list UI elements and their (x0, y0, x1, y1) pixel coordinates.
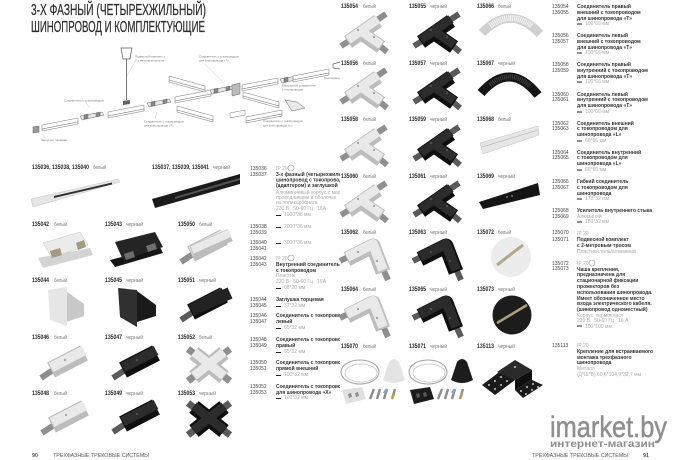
spec: 135046 135047 left feed (250, 313, 340, 329)
spec: 135040 135041 length (250, 240, 311, 250)
spec: 135113: шинопровода (577, 360, 612, 366)
spec: 135044 135045 end cap: 37*32 мм (284, 303, 306, 309)
product: 135044 white end cap: 135044 (32, 277, 49, 284)
product: 135068 white joint reinforcement (477, 116, 539, 154)
product: 135113 black recessed mounting bracket: черный (498, 343, 515, 350)
product: 135050 white straight connector: белый (199, 221, 212, 228)
icon: pendant cup and wire (121, 48, 132, 105)
spec: 135050 135051 straight connector (250, 360, 340, 376)
spec: 135050 135051 straight connector: Соединитель с токопроводом (276, 360, 351, 366)
product: 135043 black inner connector: 135043 (105, 221, 122, 228)
product: 135073 black mounting cup: черный (498, 286, 515, 293)
spec: 135058 135059: 135059 (552, 68, 569, 74)
product: 135060 white T connector: 135060 (341, 173, 358, 180)
spec: 135040 135041 length: 135040 (250, 240, 267, 246)
product: 135067 black flexible connector (477, 60, 538, 95)
spec: 135066 135067: с токопроводом для (577, 185, 628, 191)
spec: 135056 135057: Соединитель левый (577, 32, 628, 39)
title: 3-Х ФАЗНЫЙ (ЧЕТЫРЕХЖИЛЬНЫЙ) (31, 1, 206, 19)
spec: 135054 135055: 100*66 мм (585, 21, 610, 27)
spec: 135054 135055: для шинопровода «Т» (577, 16, 632, 22)
spec: 135040 135041 length: 135041 (250, 246, 267, 252)
spec: 135036 135037 track: (адаптером) и заглушкой (276, 182, 338, 189)
product: 135064 white L connector: 135064 (341, 286, 358, 293)
spec: 135058 135059: внутренний с токопроводом (577, 67, 648, 74)
footer: right page: 91 (643, 453, 649, 459)
product: 135061 black T connector: черный (430, 173, 447, 180)
spec: 135058 135059: Соединитель правый (577, 61, 631, 68)
spec: 135042 135043 inner connector (250, 255, 340, 291)
product: white three-phase track (31, 164, 120, 207)
product: 135055 black T connector (409, 3, 460, 52)
spec: 135070 135071: 135071 (552, 237, 569, 243)
spec: 135042 135043 inner connector: 135043 (250, 262, 267, 268)
spec: 135070 135071: Пластик/сталь/алюминий (577, 248, 636, 255)
spec: 135048 135049 right feed: правый (276, 342, 295, 349)
spec: 135066 135067: Гибкий соединитель (577, 178, 628, 185)
spec: 135060 135061: 135060 (552, 92, 569, 98)
product: 135054 white T connector (341, 3, 387, 52)
product: 135067 black flexible connector: черный (498, 60, 515, 67)
product: black three-phase track: 135037, 135039, 135041 (152, 164, 209, 171)
spec: 135036 135037 track (250, 164, 340, 216)
spec: 135058 135059: 135058 (552, 62, 569, 68)
product: 135060 white T connector (341, 173, 387, 221)
product: 135055 black T connector: 135055 (409, 3, 426, 10)
product: 135048 white right feed connector (32, 390, 85, 433)
spec: 135060 135061: для шинопровода «Т» (577, 103, 632, 109)
spec: 135036 135037 track: шинопровод с токопроводом (276, 178, 349, 184)
title (31, 1, 206, 36)
product: 135044 white end cap (32, 277, 84, 326)
spec: 135042 135043 inner connector: Пластик (276, 273, 296, 279)
product: 135055 black T connector: черный (430, 3, 447, 10)
spec: 135072 135073: 100*100 мм (585, 324, 612, 330)
product: 135072 white mounting cup: белый (498, 229, 511, 236)
product: 135049 black right feed connector (105, 390, 156, 432)
spec: 135062 135063: 66*66 мм (585, 138, 607, 144)
spec: 135052 135053 X connector: 135052 (250, 384, 267, 390)
product: 135067 black flexible connector: 135067 (477, 60, 494, 67)
product: 135053 black X connector: черный (199, 390, 216, 397)
product: 135066 white flexible connector: 135066 (477, 3, 494, 10)
product: 135053 black X connector: 135053 (178, 390, 195, 397)
spec: 135042 135043 inner connector: 68*20 мм (284, 285, 306, 291)
spec: 135070 135071: с 2-метровым тросом (577, 243, 631, 249)
spec: 135038 135039 length: 135038 (250, 224, 267, 230)
spec: 135113: монтажа трехфазного (577, 354, 632, 361)
spec: 135072 135073: 135072 (552, 261, 569, 267)
spec: 135042 135043 inner connector: 135042 (250, 256, 267, 262)
product: 135073 black mounting cup: 135073 (477, 286, 494, 293)
spec: 135068 135069: 135069 (552, 214, 569, 220)
watermark: imarket.by: интернет-магазин (550, 439, 655, 450)
spec: 135046 135047 left feed: 65*32 мм (284, 325, 306, 331)
spec: 135064 135065: 66*66 мм (585, 167, 607, 173)
product: 135073 black mounting cup (477, 286, 532, 334)
spec: 135068 135069: Алюминий (577, 213, 602, 220)
product: 135053 black X connector (178, 390, 230, 435)
product: 135057 black T connector: 135057 (409, 60, 426, 67)
spec: 135052 135053 X connector: для шинопровода «Х» (276, 390, 332, 396)
product: 135047 black left feed connector: черный (126, 334, 143, 341)
spec: 135113: Металл (577, 366, 595, 372)
product: 135069 black joint reinforcement: черный (498, 173, 515, 180)
product: 135061 black T connector (409, 173, 460, 221)
spec: 135072 135073: Корпус: термопласт (577, 313, 624, 319)
spec: 135066 135067: 135067 (552, 185, 569, 191)
product: 135058 white T connector: 135058 (341, 116, 358, 123)
product: 135062 white L connector: 135062 (341, 229, 358, 236)
exploded track system diagram: для шинопровода «Т» (199, 58, 229, 62)
spec: 135072 135073: 220 В 50-60 Гц 16 А (577, 318, 629, 324)
spec: 135056 135057: для шинопровода «Т» (577, 45, 632, 51)
spec: 135070 135071: Подвесной комплект (577, 236, 629, 243)
product: 135063 black L connector (409, 229, 461, 280)
spec: 135044 135045 end cap: 135045 (250, 303, 267, 309)
spec: 135060 135061: 100*66 мм (585, 109, 610, 115)
product: 135048 white right feed connector: 135048 (32, 390, 49, 397)
spec: 135062 135063: шинопровода «L» (577, 132, 622, 138)
product: 135071 black suspension kit: 135071 (409, 343, 426, 350)
spec: 135072 135073: предназначена для (577, 272, 625, 278)
product: 135063 black L connector: черный (430, 229, 447, 236)
product: 135054 white T connector: 135054 (341, 3, 358, 10)
spec: 135054 135055: 135055 (552, 10, 569, 16)
product: 135052 white X connector: белый (199, 334, 212, 341)
product: 135052 white X connector (178, 334, 230, 381)
spec: 135062 135063: Соединитель внешний (577, 120, 634, 127)
product: 135059 black T connector (409, 116, 460, 165)
product: 135043 black inner connector (105, 221, 163, 267)
spec: 135046 135047 left feed: 135047 (250, 319, 267, 325)
footer: right page: ТРЕХФАЗНЫЕ ТРЕКОВЫЕ СИСТЕМЫ (532, 453, 628, 459)
exploded track system diagram: Подвесной комплект с (135, 54, 166, 58)
exploded track system diagram: Соединитель с токопроводом (263, 119, 303, 123)
product: 135048 white right feed connector: белый (54, 390, 67, 397)
exploded track system diagram: Соединитель с токопроводом (64, 98, 104, 102)
specification list: right page (552, 3, 653, 378)
product: 135050 white straight connector: 135050 (178, 221, 195, 228)
spec: 135054 135055: внешний с токопроводом (577, 9, 641, 16)
spec: 135056 135057: 135056 (552, 33, 569, 39)
spec: 135050 135051 straight connector: прямой внешний (276, 365, 318, 372)
spec: 135062 135063 (552, 120, 634, 144)
product: 135068 white joint reinforcement: белый (498, 116, 511, 123)
spec: 135072 135073: Имеет обозначенное место (577, 295, 644, 302)
product: 135046 white left feed connector (32, 334, 84, 378)
exploded track system diagram: Соединитель с токопроводом (144, 120, 184, 124)
spec: 135050 135051 straight connector: 100*32 мм (284, 372, 309, 378)
spec: 135113 (552, 343, 653, 378)
spec: 135066 135067: 135066 (552, 179, 569, 185)
spec: 135058 135059: для шинопровода «Т» (577, 74, 632, 80)
exploded track system diagram: для шинопровода «L» (263, 124, 293, 128)
spec: 135113: Крепление для встраиваемого (577, 349, 653, 355)
spec: 135056 135057 (552, 32, 641, 56)
specification list: left page (250, 164, 340, 399)
spec: 135062 135063: 135063 (552, 126, 569, 132)
spec: 135052 135053 X connector: Соединитель с токопроводом (276, 384, 351, 390)
spec: 135036 135037 track: проводниками в оболочке (276, 195, 337, 201)
title: ШИНОПРОВОД И КОМПЛЕКТУЮЩИЕ (31, 19, 205, 36)
spec: 135072 135073 (552, 260, 653, 330)
product: 135051 black straight connector (178, 277, 230, 320)
spec: 135036 135037 track: из поликарбоната (276, 200, 318, 206)
spec: 135050 135051 straight connector: 135050 (250, 360, 267, 366)
spec: 135068 135069: 135068 (552, 208, 569, 214)
exploded track system diagram: 2-х метровым тросом (135, 58, 164, 62)
spec: 135068 135069: 180*32 мм (585, 219, 610, 225)
spec: 135054 135055 (552, 3, 641, 27)
product: 135065 black L connector (409, 286, 461, 337)
product: 135061 black T connector: 135061 (409, 173, 426, 180)
product: 135042 white inner connector: 135042 (32, 221, 49, 228)
product: 135046 white left feed connector: 135046 (32, 334, 49, 341)
product: black three-phase track: черный (213, 164, 230, 171)
spec: 135056 135057: 100*66 мм (585, 50, 610, 56)
spec: 135064 135065: 135065 (552, 155, 569, 161)
product: 135045 black end cap (105, 277, 156, 327)
product: 135065 black L connector: черный (430, 286, 447, 293)
spec: 135038 135039 length (250, 224, 311, 234)
product: 135064 white L connector (340, 286, 388, 337)
spec: 135066 135067: шинопровода (577, 191, 612, 197)
product: 135072 white mounting cup (477, 229, 531, 277)
spec: 135036 135037 track: 135036 (250, 166, 267, 172)
exploded track system diagram: Заглушка торцевая (41, 138, 67, 142)
spec: 135064 135065 (552, 149, 641, 173)
spec: 135056 135057: 135057 (552, 39, 569, 45)
product: 135051 black straight connector: 135051 (178, 277, 195, 284)
spec: 135113: (Д*Ш*В) 60,6*104,9*32,7 мм (577, 372, 642, 378)
product: 135113 black recessed mounting bracket (477, 343, 543, 398)
product: 135113 black recessed mounting bracket: 135113 (477, 343, 494, 350)
spec: 135072 135073: Чаша крепления, (577, 267, 620, 273)
spec: 135038 135039 length: 135039 (250, 230, 267, 236)
exploded track system diagram: для шинопровода «Т» (144, 124, 174, 128)
spec: 135072 135073: 135073 (552, 266, 569, 272)
footer: left page: 90 (32, 453, 38, 459)
spec: 135038 135039 length: 2000*36 мм (284, 224, 311, 230)
spec: 135068 135069 (552, 208, 652, 225)
spec: 135070 135071 (552, 230, 636, 255)
spec: 135072 135073: стационарной фиксации (577, 277, 638, 284)
product: 135056 white T connector: белый (363, 60, 376, 67)
spec: 135044 135045 end cap: Заглушка торцевая (276, 297, 324, 303)
product: 135047 black left feed connector: 135047 (105, 334, 122, 341)
spec: 135048 135049 right feed: 135049 (250, 343, 267, 349)
product: 135043 black inner connector: черный (126, 221, 143, 228)
product: 135058 white T connector (341, 116, 387, 165)
spec: 135054 135055: 135054 (552, 4, 569, 10)
spec: 135072 135073: использования шинопровода. (577, 290, 653, 296)
exploded track system diagram: Внутренний соединитель (282, 84, 316, 88)
product: 135047 black left feed connector (105, 334, 156, 378)
spec: 135046 135047 left feed: Соединитель с токопроводом (276, 313, 351, 319)
spec: 135036 135037 track: 220 В 50-60 Гц 16А (276, 206, 327, 212)
product: 135071 black suspension kit: черный (430, 343, 447, 350)
product: 135066 white flexible connector (477, 3, 540, 34)
spec: 135070 135071: IP 20 (577, 231, 589, 237)
exploded track system diagram: Токоподвод (324, 76, 340, 80)
spec: 135036 135037 track: 1000*36 мм (284, 212, 311, 218)
spec: 135056 135057: внешний с токопроводом (577, 38, 641, 45)
exploded track system diagram (33, 48, 340, 142)
spec: 135060 135061: внутренний с токопроводом (577, 96, 648, 103)
spec: 135072 135073: (шинопровод одноместный) (577, 306, 648, 313)
product: 135051 black straight connector: черный (199, 277, 216, 284)
spec: 135052 135053 X connector: 100*32 мм (284, 395, 309, 401)
product: 135057 black T connector (409, 60, 460, 108)
product: 135062 white L connector: белый (363, 229, 376, 236)
product: white three-phase track: 135036, 135038, 135040 (32, 164, 89, 171)
spec: 135042 135043 inner connector: 220 В 50-60 Гц 16А (276, 279, 327, 285)
spec: 135048 135049 right feed: 135048 (250, 337, 267, 343)
product: 135054 white T connector: белый (363, 3, 376, 10)
product: 135049 black right feed connector: 135049 (105, 390, 122, 397)
product: 135056 white T connector (341, 60, 387, 108)
spec: 135048 135049 right feed: 65*32 мм (284, 349, 306, 355)
product: 135044 white end cap: белый (54, 277, 67, 284)
spec: 135048 135049 right feed: Соединитель с токопроводом (276, 337, 351, 343)
spec: 135062 135063: 135062 (552, 121, 569, 127)
product: 135057 black T connector: черный (430, 60, 447, 67)
product: 135062 white L connector (340, 229, 388, 280)
spec: 135042 135043 inner connector: Внутренний соединитель (276, 261, 340, 268)
product: 135072 white mounting cup: 135072 (477, 229, 494, 236)
spec: 135048 135049 right feed (250, 337, 340, 353)
spec: 135050 135051 straight connector: 135051 (250, 366, 267, 372)
exploded track system diagram: Соединитель с токопроводом (199, 54, 239, 58)
spec: 135058 135059: 100*66 мм (585, 79, 610, 85)
spec: 135058 135059 (552, 61, 648, 85)
product: 135045 black end cap: черный (126, 277, 143, 284)
product: 135049 black right feed connector: черный (126, 390, 143, 397)
spec: 135064 135065: Соединитель внутренний (577, 149, 641, 156)
product: white three-phase track: белый (93, 164, 106, 171)
spec: 135044 135045 end cap (250, 297, 324, 307)
product: 135060 white T connector: белый (363, 173, 376, 180)
spec: 135062 135063: с токопроводом для (577, 126, 628, 132)
spec: 135072 135073: входа электрического кабеля. (577, 300, 652, 307)
product: 135050 white straight connector (178, 221, 230, 262)
spec: 135064 135065: 135064 (552, 150, 569, 156)
spec: 135060 135061: 135061 (552, 97, 569, 103)
exploded track system diagram: с токопроводом (282, 88, 303, 92)
product: 135065 black L connector: 135065 (409, 286, 426, 293)
product: 135052 white X connector: 135052 (178, 334, 195, 341)
spec: 135036 135037 track: 135037 (250, 172, 267, 178)
spec: 135036 135037 track: 3-х фазный (четырехжильный) (276, 171, 354, 178)
spec: 135113: IP 20 (577, 343, 589, 349)
spec: 135036 135037 track: Алюминиевый корпус с медью (276, 189, 347, 196)
product: 135069 black joint reinforcement (477, 173, 540, 209)
spec: 135040 135041 length: 3000*36 мм (284, 240, 311, 246)
spec: 135064 135065: шинопровода «L» (577, 161, 622, 167)
product: 135046 white left feed connector: белый (54, 334, 67, 341)
spec: 135113: 135113 (552, 343, 569, 349)
product: 135063 black L connector: 135063 (409, 229, 426, 236)
spec: 135042 135043 inner connector: с токопроводом (276, 268, 316, 274)
spec: 135060 135061: Соединитель левый (577, 91, 628, 98)
spec: 135046 135047 left feed: 135046 (250, 313, 267, 319)
product: 135070 white suspension kit: 135070 (341, 343, 358, 350)
product: 135056 white T connector: 135056 (341, 60, 358, 67)
spec: 135060 135061 (552, 91, 648, 115)
product: 135042 white inner connector (32, 221, 93, 268)
spec: 135054 135055: Соединитель правый (577, 3, 631, 10)
spec: 135070 135071: 135070 (552, 230, 569, 236)
product: 135066 white flexible connector: белый (498, 3, 511, 10)
spec: 135072 135073: IP 20 (577, 261, 589, 267)
product: 135042 white inner connector: белый (54, 221, 67, 228)
spec: 135042 135043 inner connector: IP 20 (276, 256, 288, 262)
spec: 135066 135067: 173*32 мм (585, 196, 610, 202)
spec: 135072 135073: прожекторов без (577, 283, 620, 290)
product: 135059 black T connector: черный (430, 116, 447, 123)
product: 135069 black joint reinforcement: 135069 (477, 173, 494, 180)
product: 135071 black suspension kit (409, 343, 473, 404)
product: 135068 white joint reinforcement: 135068 (477, 116, 494, 123)
product: black three-phase track (152, 164, 240, 208)
product: 135059 black T connector: 135059 (409, 116, 426, 123)
spec: 135052 135053 X connector: 135053 (250, 390, 267, 396)
spec: 135046 135047 left feed: левый (276, 318, 292, 325)
product: 135064 white L connector: белый (363, 286, 376, 293)
spec: 135036 135037 track: IP 20 (276, 166, 288, 172)
product: 135070 white suspension kit: белый (363, 343, 376, 350)
spec: 135044 135045 end cap: 135044 (250, 297, 267, 303)
spec: 135052 135053 X connector (250, 384, 340, 399)
product: 135045 black end cap: 135045 (105, 277, 122, 284)
spec: 135066 135067 (552, 178, 628, 202)
footer: left page: ТРЕХФАЗНЫЕ ТРЕКОВЫЕ СИСТЕМЫ (53, 453, 149, 459)
product: 135058 white T connector: белый (363, 116, 376, 123)
spec: 135068 135069: Усилитель внутреннего стыка (577, 208, 652, 214)
product: 135070 white suspension kit (341, 343, 405, 404)
spec: 135064 135065: с токопроводом для (577, 155, 628, 161)
